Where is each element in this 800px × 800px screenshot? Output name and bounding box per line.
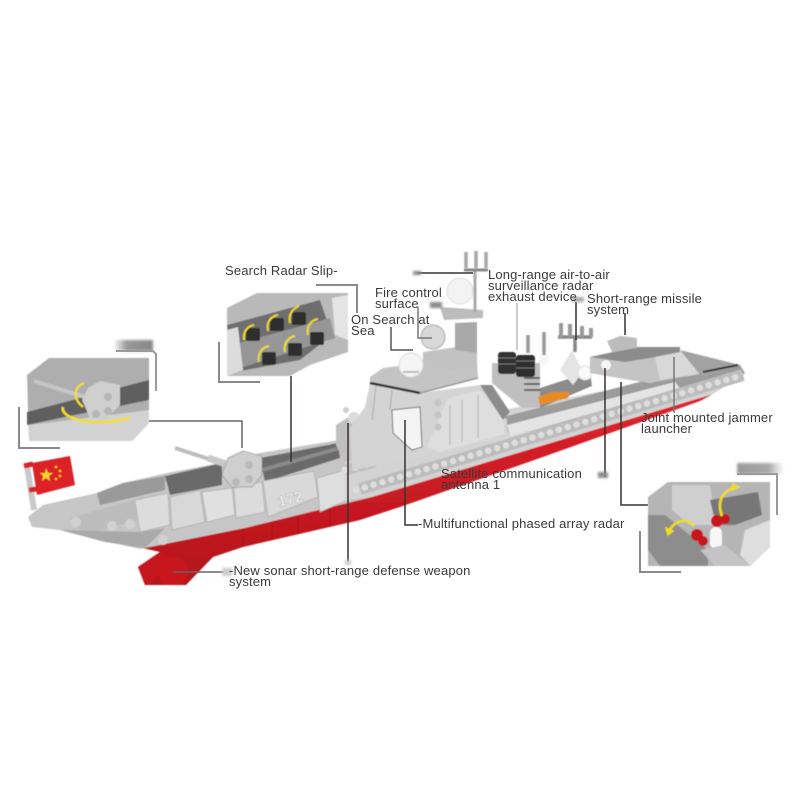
bridge superstructure: [350, 362, 510, 470]
label: long-range radar: exhaust device: [488, 289, 577, 304]
flag: [24, 456, 75, 510]
main gun: [175, 448, 262, 487]
label: fire control surface: Fire control: [375, 285, 442, 300]
label: fire control surface: surface: [375, 296, 419, 311]
label: satellite antenna: Satellite communication: [441, 466, 582, 481]
red hull: [138, 394, 713, 587]
stern deck: [680, 350, 740, 377]
label: long-range radar: surveillance radar: [488, 278, 594, 293]
orange part: [538, 392, 570, 405]
label: sonar defense weapon: system: [229, 574, 271, 589]
label: joint mounted jammer: Joint mounted jammer: [641, 410, 773, 425]
label: sonar defense weapon: -New sonar short-range defense weapon: [229, 563, 471, 578]
leader line end smudges: [222, 271, 608, 576]
warship model: [24, 251, 745, 587]
rear superstructure: [590, 336, 702, 383]
label: joint mounted jammer: launcher: [641, 421, 693, 436]
hull number 172: 172: [276, 488, 305, 511]
exhaust block: [492, 332, 544, 408]
midship radar: [539, 323, 592, 408]
label: search radar: Search Radar Slip-: [225, 263, 338, 278]
inset: main gun rotation: [27, 358, 149, 441]
label: satellite antenna: antenna 1: [441, 477, 500, 492]
label: phased array radar: -Multifunctional phased array radar: [418, 516, 625, 531]
label: long-range radar: Long-range air-to-air: [488, 267, 610, 282]
midship hull side: [345, 365, 745, 500]
radar mast: [421, 251, 488, 373]
label: on search at sea: Sea: [351, 323, 375, 338]
white radome: [399, 353, 423, 377]
forward missile mount: [336, 407, 395, 468]
label: on search at sea: On Search at: [351, 312, 430, 327]
inset frame: launch cells: [219, 285, 357, 382]
hull foredeck: [28, 420, 372, 549]
leader lines: [149, 273, 674, 572]
label: short-range missile: system: [587, 302, 629, 317]
inset: rear launcher hatches: [648, 482, 770, 566]
inset frame: launcher: [640, 463, 783, 572]
label: short-range missile: Short-range missile: [587, 291, 702, 306]
inset frame: gun: [19, 340, 156, 448]
inset: vertical launch cells: [227, 293, 348, 376]
